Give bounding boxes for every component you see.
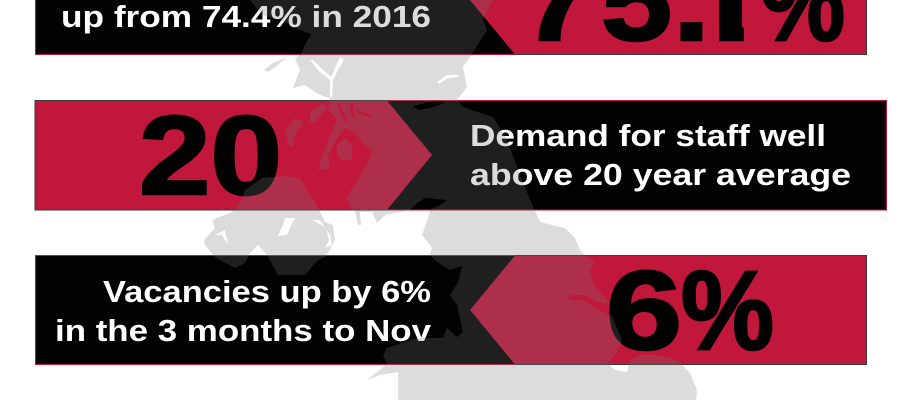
- map: United Kingdom overlay: [204, 0, 697, 400]
- panel: staff demand bar: [35, 93, 887, 218]
- number: 75.1%: [521, 0, 845, 64]
- text: vacancies description: Vacancies up by 6%: [103, 274, 431, 309]
- map: Islay: [285, 118, 303, 147]
- map: Skye: [264, 57, 287, 72]
- arrow: demand red panel: [35, 100, 432, 210]
- text: employment description: up from 74.4% in 2016: [61, 0, 431, 34]
- number: 6%: 6: [606, 248, 682, 373]
- map: Northern Ireland: [204, 176, 335, 275]
- panel: vacancies bar: [36, 248, 867, 373]
- panel: employment rate bar: [36, 0, 867, 64]
- number: 20: 20: [139, 93, 282, 218]
- map: Arran: [337, 138, 352, 160]
- text: demand description: Demand for staff well: [470, 118, 826, 153]
- number: 6%: %: [681, 248, 774, 373]
- arrow: vacancies red panel: [470, 256, 867, 364]
- arrow: employment red panel: [470, 0, 867, 54]
- number: 6%: [606, 248, 774, 373]
- text: demand description line two: above 20 year average: [470, 157, 851, 192]
- text: vacancies description line two: in the 3 months to Nov: [55, 313, 432, 348]
- map: Jura: [310, 103, 327, 123]
